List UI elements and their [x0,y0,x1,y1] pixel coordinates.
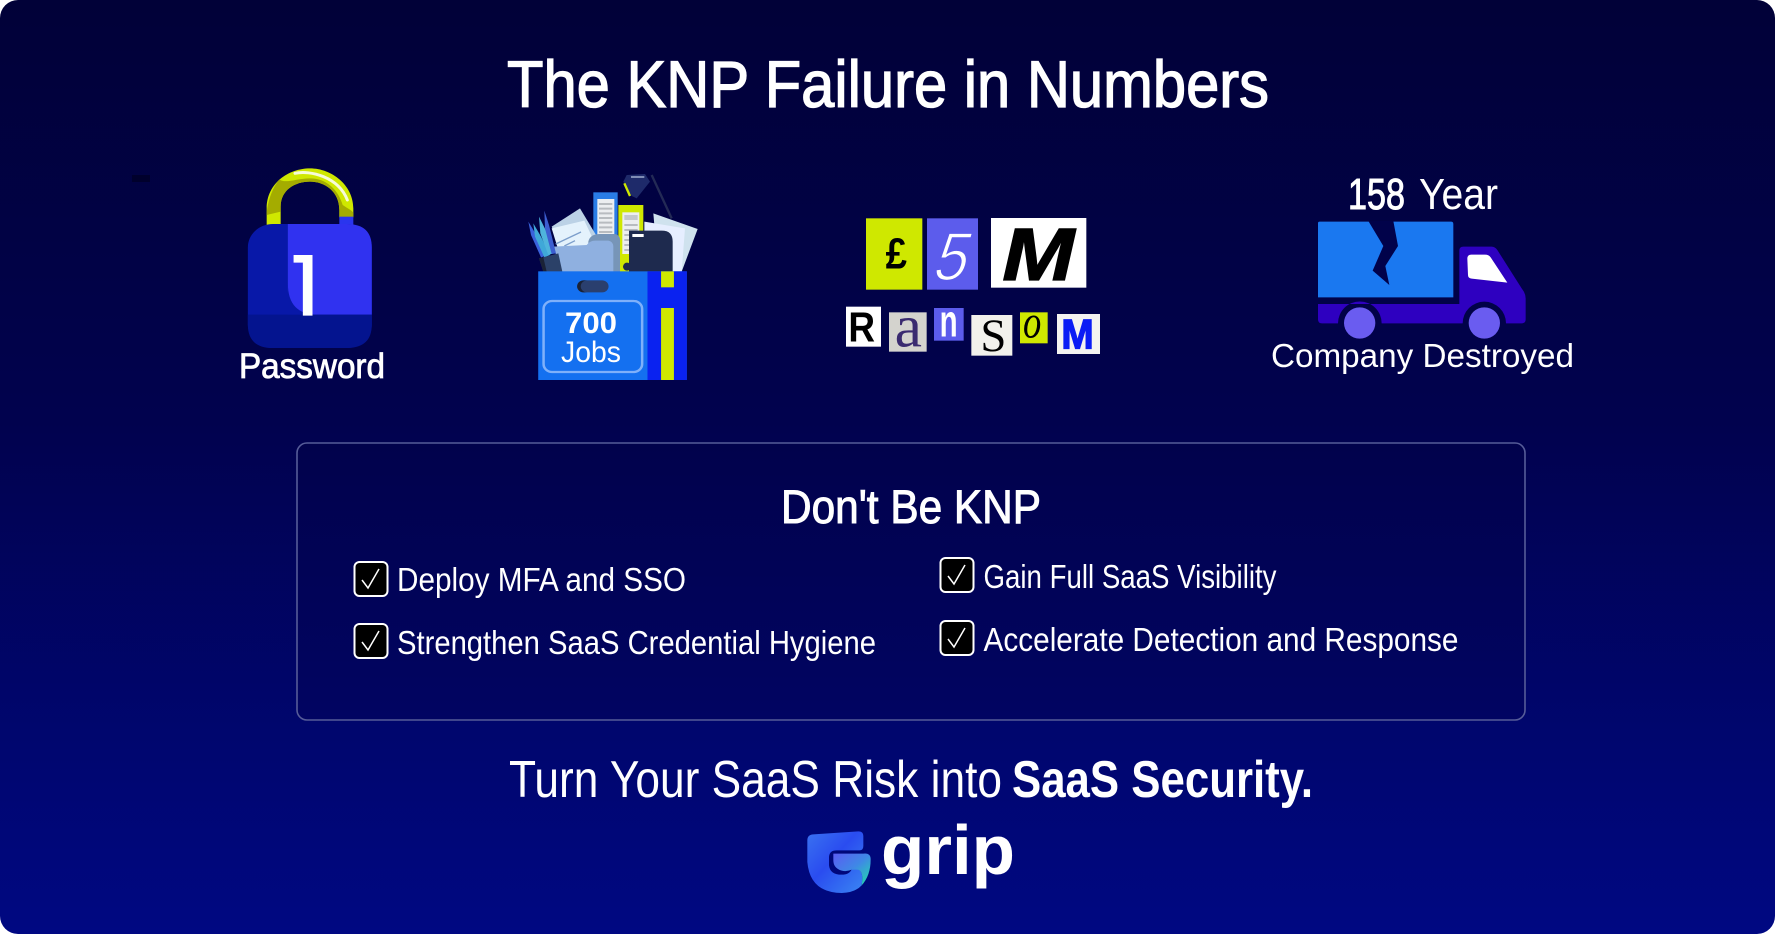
call to action: SaaS Security. [1012,751,1313,809]
title: The KNP Failure in Numbers [507,47,1269,121]
ransom amount: £5M: M [1002,213,1076,296]
label: Password: Password [239,347,385,386]
label: 700: 700 [565,307,617,340]
label: 158: 158 [1348,170,1405,219]
ransom word letters [846,294,1100,362]
ransom word letters: n [940,296,958,347]
label: Year: Year [1419,170,1498,219]
stat: 700 jobs box [528,174,698,380]
icon: grip shield [807,831,871,893]
ransom amount: £5M [866,213,1086,296]
heading: Don't Be KNP: Don't Be KNP [781,480,1041,533]
ransom word letters: R [848,304,875,351]
ransom word letters: a [895,294,922,360]
checklist item: Accelerate Detection and Response: Accelerate Detection and Response [984,621,1458,658]
logo: grip [807,811,1015,893]
icon: office box contents [528,174,698,272]
icon: broken truck [1318,221,1526,339]
small dark mark [132,175,150,182]
checklist item: Strengthen SaaS Credential Hygiene: Strengthen SaaS Credential Hygiene [397,624,876,661]
ransom amount: £5M: 5 [926,218,982,295]
checklist item: Gain Full SaaS Visibility: Gain Full SaaS Visibility [984,558,1277,595]
ransom word letters: M [1061,310,1094,357]
ransom word letters: S [980,310,1006,362]
call to action: Turn Your SaaS Risk into [509,751,1002,809]
checklist item: Deploy MFA and SSO: Deploy MFA and SSO [397,561,686,598]
icon: padlock body [248,224,372,348]
stat: 1 password [239,168,385,386]
wordmark: grip: grip [881,811,1015,889]
icon: box body [538,271,687,380]
ransom amount: £5M: £ [886,230,907,278]
stat: 158 year company destroyed [1271,170,1574,374]
label: Company Destroyed: Company Destroyed [1271,337,1574,374]
stat: £5M ransom note [846,213,1100,362]
label: Jobs: Jobs [561,336,621,369]
ransom word letters: o [1023,297,1041,349]
panel: Don't Be KNP [297,443,1525,720]
icon: padlock shackle [267,168,353,227]
